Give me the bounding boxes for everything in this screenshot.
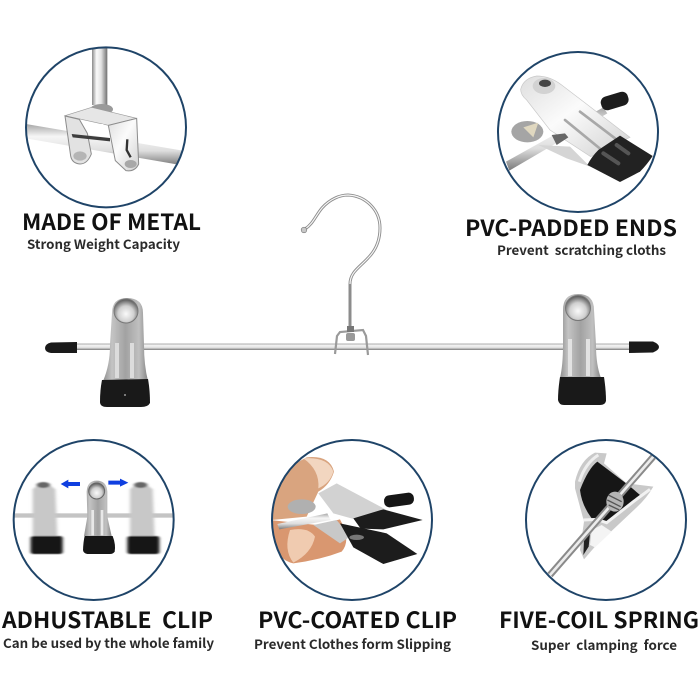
left clip xyxy=(100,298,150,407)
subheading: Super clamping force xyxy=(531,635,677,654)
subheading: Prevent Clothes form Slipping xyxy=(254,634,451,653)
right end cap xyxy=(629,342,659,353)
right clip xyxy=(558,294,606,405)
subheading: Strong Weight Capacity xyxy=(27,234,181,253)
heading: FIVE-COIL SPRING xyxy=(499,603,699,635)
crossbar xyxy=(76,344,631,350)
subheading: Prevent scratching cloths xyxy=(497,240,666,259)
blue arrow left xyxy=(61,480,80,488)
panel: made of metal xyxy=(22,47,201,253)
panel: five-coil spring xyxy=(499,440,699,654)
panel: PVC-coated clip xyxy=(254,440,457,653)
heading: ADHUSTABLE CLIP xyxy=(1,603,213,635)
panel: PVC-padded ends xyxy=(465,52,677,259)
hook xyxy=(305,195,380,328)
circular photo: metal bracket xyxy=(26,47,186,207)
heading: PVC-PADDED ENDS xyxy=(465,211,677,243)
blue arrow right xyxy=(108,479,128,487)
heading: PVC-COATED CLIP xyxy=(258,603,457,635)
circular photo: clip with black pad xyxy=(498,52,658,212)
circular photo: fingers pressing clip xyxy=(270,440,432,600)
heading: MADE OF METAL xyxy=(22,205,201,237)
subheading: Can be used by the whole family xyxy=(3,633,215,652)
left end cap xyxy=(45,342,77,353)
circular photo: spring side view xyxy=(526,440,686,600)
circular photo: sliding clips xyxy=(13,440,177,600)
main hanger xyxy=(45,195,659,407)
panel: adjustable clip xyxy=(1,440,215,652)
centre bracket xyxy=(335,326,368,355)
hook tip xyxy=(301,227,307,233)
